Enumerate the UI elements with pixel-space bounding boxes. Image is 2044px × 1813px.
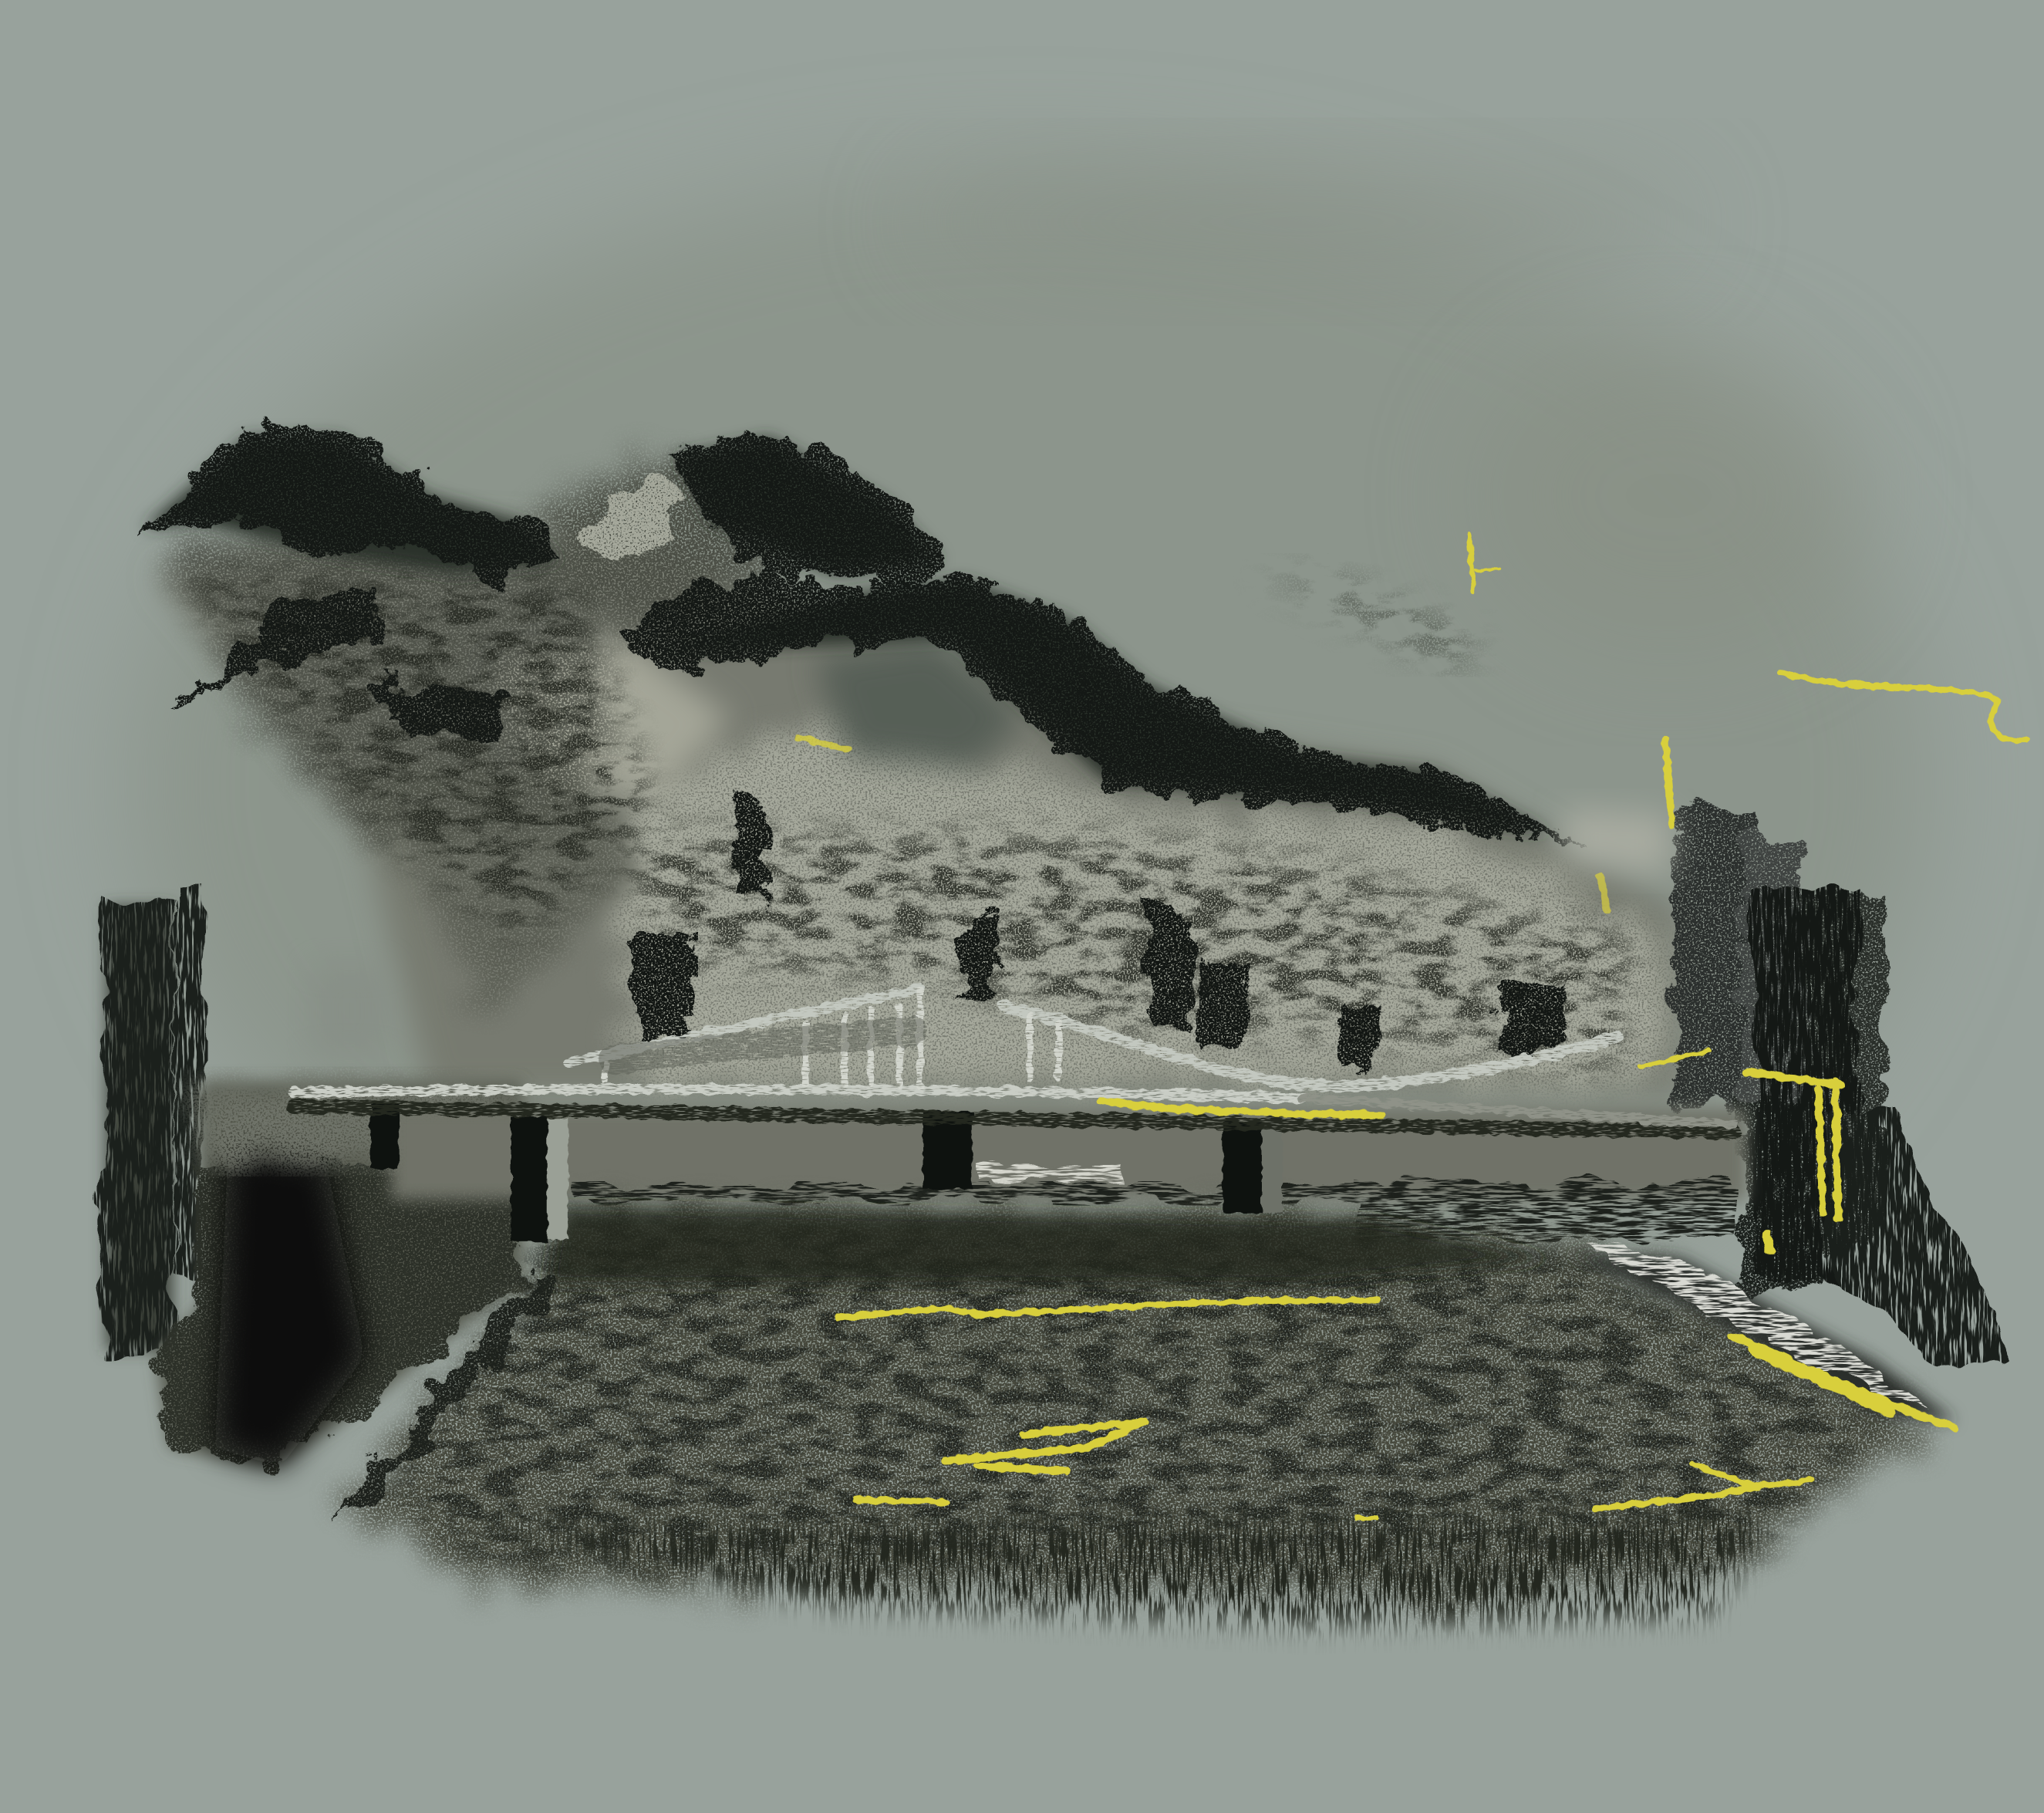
mountain dark ridges [137, 424, 1577, 848]
mountain body [157, 457, 1681, 1096]
sky smudge [130, 157, 1929, 1396]
yellow crayon marks [798, 535, 2027, 1518]
road surface [339, 1207, 1955, 1624]
left tower and embankment [102, 887, 521, 1467]
right tower cluster [1564, 809, 2014, 1369]
bridge underside band [391, 1109, 1747, 1243]
bridge piers [370, 1103, 1283, 1241]
bridge deck and cables [293, 988, 1734, 1132]
hillside buildings [310, 798, 1562, 1072]
